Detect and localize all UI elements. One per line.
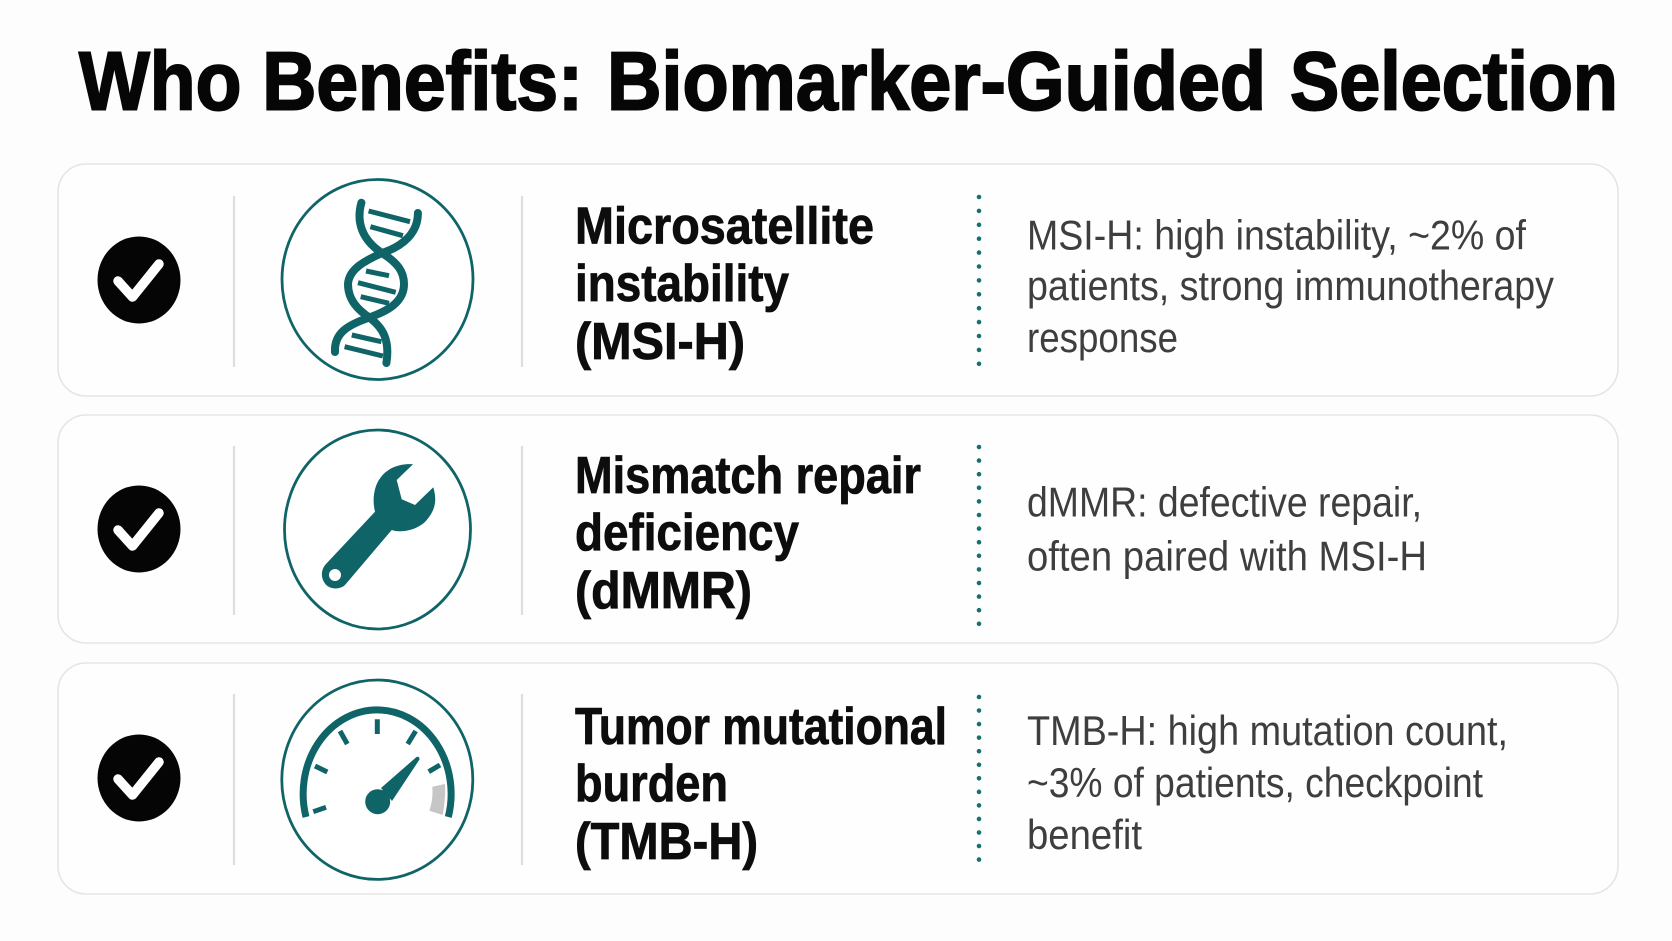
heading: microsatellite instability: [575, 196, 874, 370]
icon: DNA helix: [282, 180, 473, 380]
heading: tumor mutational burden: [575, 697, 947, 870]
description: dMMR: [1027, 478, 1427, 580]
title: Biomarker-Guided: [607, 34, 1266, 128]
heading: microsatellite instability: instability: [575, 254, 789, 312]
heading: mismatch repair deficiency: [575, 446, 921, 619]
panel: mismatch repair deficiency: [58, 415, 1618, 643]
description: TMB-H: [1027, 707, 1508, 858]
heading: tumor mutational burden: burden: [575, 754, 728, 812]
icon: gauge: [282, 680, 473, 879]
heading: mismatch repair deficiency: deficiency: [575, 503, 799, 561]
description: TMB-H: TMB-H: high mutation count,: [1027, 707, 1508, 754]
description: TMB-H: benefit: [1027, 811, 1142, 858]
heading: tumor mutational burden: (TMB-H): [575, 812, 758, 870]
icon: wrench: [284, 430, 470, 629]
description: TMB-H: ~3% of patients, checkpoint: [1027, 759, 1483, 806]
description: dMMR: dMMR: defective repair,: [1027, 478, 1422, 526]
heading: microsatellite instability: (MSI-H): [575, 312, 745, 370]
description: MSI-H: MSI-H: high instability, ~2% of: [1027, 212, 1526, 258]
icon: check mark 2: [98, 486, 180, 572]
heading: mismatch repair deficiency: (dMMR): [575, 561, 752, 619]
title: Who Benefits:: [79, 34, 583, 128]
heading: microsatellite instability: Microsatellite: [575, 196, 874, 254]
description: dMMR: often paired with MSI-H: [1027, 532, 1427, 580]
description: MSI-H: patients, strong immunotherapy: [1027, 262, 1554, 309]
title: Selection: [1290, 34, 1618, 128]
panel: tumor mutational burden: [58, 663, 1618, 894]
description: MSI-H: response: [1027, 314, 1178, 361]
heading: mismatch repair deficiency: Mismatch repair: [575, 446, 921, 504]
heading: tumor mutational burden: Tumor mutational: [575, 697, 947, 755]
panel: microsatellite instability: [58, 164, 1618, 396]
title: [79, 34, 1618, 128]
description: MSI-H: [1027, 212, 1554, 361]
icon: check mark 1: [98, 236, 180, 324]
icon: check mark 3: [98, 734, 180, 822]
